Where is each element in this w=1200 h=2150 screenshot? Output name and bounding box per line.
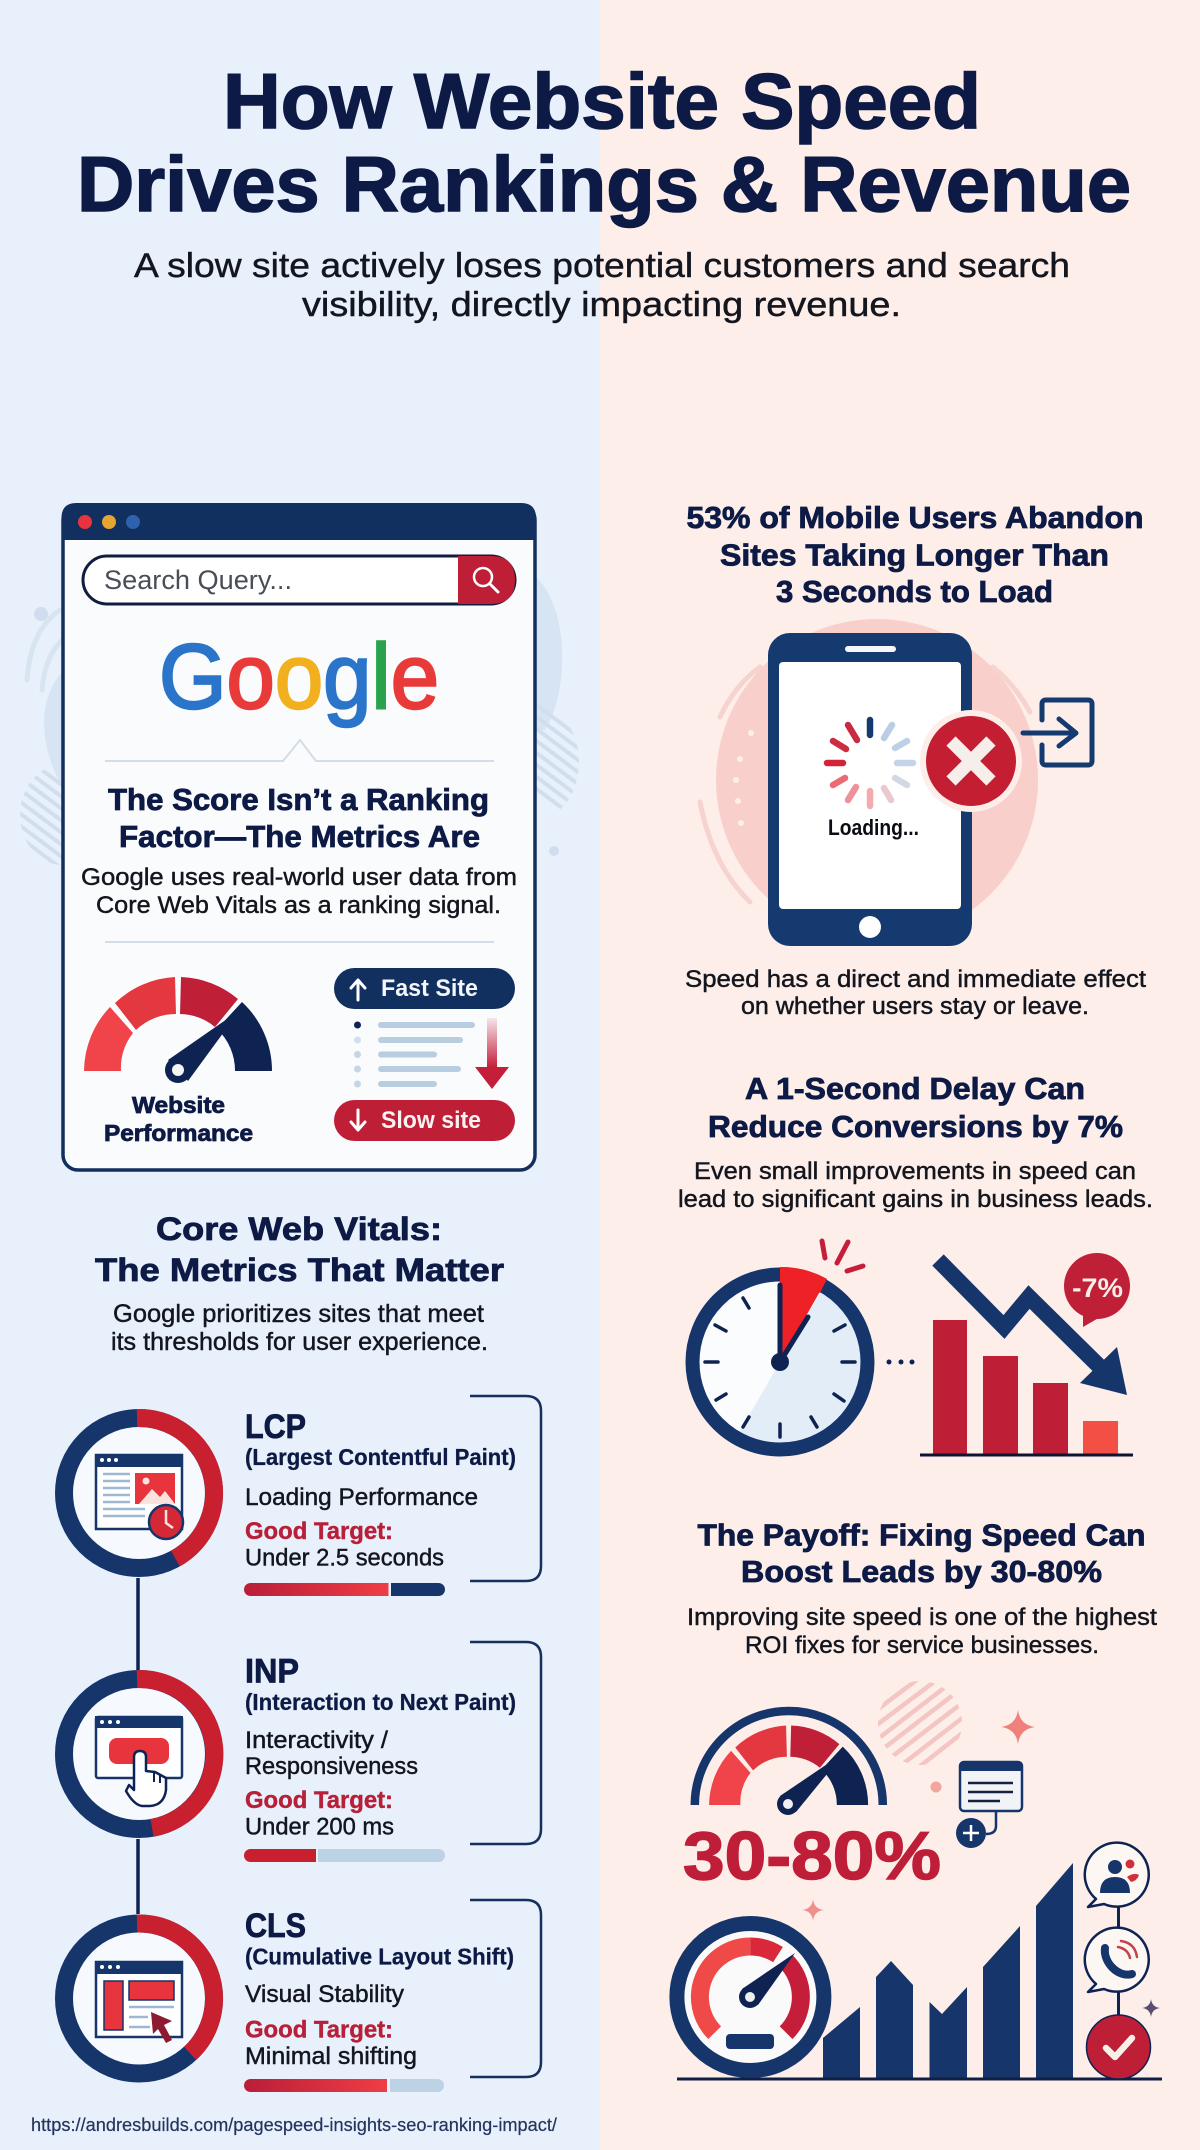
title: Drives Rankings & Revenue xyxy=(77,140,1131,228)
heading: core web vitals: The Metrics That Matter xyxy=(95,1252,504,1288)
search bar xyxy=(83,556,515,604)
heading: score vs metrics: The Score Isn’t a Ranking xyxy=(108,782,489,817)
text: speed effect: Speed has a direct and immediate effect xyxy=(685,966,1146,993)
timeline connectors xyxy=(136,1578,140,1914)
source url: https://andresbuilds.com/pagespeed-insights-seo-ranking-impact/ xyxy=(31,2115,557,2135)
subtitle: A slow site actively loses potential customers and search xyxy=(134,247,1070,285)
INP text: Interactivity / xyxy=(245,1727,388,1754)
heading: 53% abandon: 53% of Mobile Users Abandon xyxy=(686,500,1144,535)
text: core web vitals intro xyxy=(111,1300,488,1356)
CLS text: CLS xyxy=(245,1907,306,1945)
text: speed effect xyxy=(685,966,1146,1020)
heading: 53% abandon: Sites Taking Longer Than xyxy=(720,538,1109,572)
title xyxy=(77,57,1131,228)
icon: phone bubble xyxy=(1085,1928,1149,1992)
window dots xyxy=(78,515,140,529)
Google logo: Google xyxy=(159,626,439,728)
heading: core web vitals: Core Web Vitals: xyxy=(156,1211,442,1247)
gauge label: Website xyxy=(132,1092,225,1118)
LCP progress bar xyxy=(244,1583,445,1596)
INP bracket xyxy=(470,1642,541,1844)
slow site pill: Slow site xyxy=(381,1107,481,1134)
INP text xyxy=(245,1652,516,1840)
heading: score vs metrics xyxy=(108,782,489,854)
-7% callout xyxy=(1064,1253,1130,1327)
gauge label: Performance xyxy=(104,1120,253,1146)
INP text: INP xyxy=(245,1652,299,1690)
phone body xyxy=(768,633,972,946)
heading: 1-second delay: Reduce Conversions by 7% xyxy=(708,1109,1123,1144)
heading: score vs metrics: Factor—The Metrics Are xyxy=(119,819,480,854)
text: small improvements: lead to significant gains in business leads. xyxy=(678,1186,1153,1213)
bar chart: falling conversions xyxy=(920,1253,1133,1455)
CLS progress bar xyxy=(244,2079,444,2092)
decorative blobs behind browser card xyxy=(10,572,590,875)
icon: lead form xyxy=(956,1762,1022,1848)
arrow: ranking falls xyxy=(475,1018,509,1089)
heading: the payoff: The Payoff: Fixing Speed Can xyxy=(698,1518,1146,1552)
heading: the payoff: Boost Leads by 30-80% xyxy=(741,1554,1102,1589)
slow site pill xyxy=(334,1100,515,1141)
LCP text xyxy=(245,1408,516,1572)
phone illustration xyxy=(700,619,1092,946)
text: small improvements xyxy=(678,1158,1153,1213)
INP progress bar xyxy=(244,1849,445,1862)
icon: people bubble xyxy=(1085,1843,1149,1907)
exit icon xyxy=(1023,700,1092,765)
text: highest roi: ROI fixes for service businesses. xyxy=(745,1632,1099,1659)
top speedometer xyxy=(695,1711,883,1815)
stat: 30-80%: 30-80% xyxy=(683,1818,941,1894)
text: core web vitals intro: Google prioritizes sites that meet xyxy=(113,1300,484,1328)
decorative stripes and sparkles xyxy=(802,1655,1160,2017)
body text xyxy=(81,864,517,919)
INP ring icon xyxy=(64,1679,214,1829)
CLS text: Good Target: xyxy=(245,2016,393,2044)
gauge label xyxy=(104,1092,253,1146)
icon stack: leads, calls, conversion xyxy=(1085,1843,1150,2079)
LCP bracket xyxy=(470,1396,541,1581)
growth bar chart xyxy=(677,1863,1162,2079)
panel: LCP xyxy=(64,1396,541,1596)
LCP text: Loading Performance xyxy=(245,1484,478,1511)
LCP text: Good Target: xyxy=(245,1518,393,1545)
LCP text: (Largest Contentful Paint) xyxy=(245,1444,516,1470)
CLS ring icon xyxy=(64,1923,214,2074)
search bar: Search Query... xyxy=(104,565,292,595)
error badge xyxy=(920,710,1022,812)
text: core web vitals intro: its thresholds for user experience. xyxy=(111,1328,488,1356)
body text: Core Web Vitals as a ranking signal. xyxy=(96,892,501,919)
INP text: Under 200 ms xyxy=(245,1814,394,1840)
heading: 53% abandon xyxy=(686,500,1144,609)
panel: browser card with Google xyxy=(62,503,536,1170)
heading: 53% abandon: 3 Seconds to Load xyxy=(776,574,1053,609)
-7% callout: -7% xyxy=(1072,1273,1123,1303)
heading: 1-second delay xyxy=(708,1071,1123,1144)
subtitle: visibility, directly impacting revenue. xyxy=(302,286,901,324)
large speedometer xyxy=(677,1924,824,2070)
LCP ring icon xyxy=(64,1418,214,1568)
ranking list xyxy=(354,1022,475,1088)
loading label: Loading... xyxy=(828,815,919,840)
browser title bar xyxy=(62,503,536,540)
subtitle xyxy=(134,247,1070,324)
CLS text: Visual Stability xyxy=(245,1981,404,2008)
panel: INP xyxy=(64,1642,541,1862)
trend arrow xyxy=(938,1260,1127,1395)
text: highest roi xyxy=(687,1604,1157,1659)
INP text: (Interaction to Next Paint) xyxy=(245,1689,516,1715)
fast site pill xyxy=(334,968,515,1009)
body text: Google uses real-world user data from xyxy=(81,864,517,891)
INP text: Good Target: xyxy=(245,1787,393,1814)
CLS bracket xyxy=(470,1900,541,2077)
LCP text: Under 2.5 seconds xyxy=(245,1544,444,1572)
CLS text xyxy=(245,1907,514,2070)
fast site pill: Fast Site xyxy=(381,975,478,1002)
CLS text: Minimal shifting xyxy=(245,2043,417,2070)
heading: the payoff xyxy=(698,1518,1146,1589)
icon: check badge xyxy=(1086,2015,1150,2079)
panel: CLS xyxy=(64,1900,541,2092)
text: speed effect: on whether users stay or leave. xyxy=(741,993,1089,1020)
text: small improvements: Even small improvements in speed can xyxy=(694,1158,1136,1185)
CLS text: (Cumulative Layout Shift) xyxy=(245,1944,514,1970)
heading: core web vitals xyxy=(95,1211,504,1288)
text: highest roi: Improving site speed is one of the highest xyxy=(687,1604,1157,1631)
LCP text: LCP xyxy=(245,1408,306,1446)
title: How Website Speed xyxy=(223,57,981,145)
heading: 1-second delay: A 1-Second Delay Can xyxy=(745,1071,1085,1106)
clock illustration xyxy=(692,1241,914,1453)
performance gauge xyxy=(84,977,272,1083)
INP text: Responsiveness xyxy=(245,1753,418,1780)
loading spinner xyxy=(827,720,913,806)
